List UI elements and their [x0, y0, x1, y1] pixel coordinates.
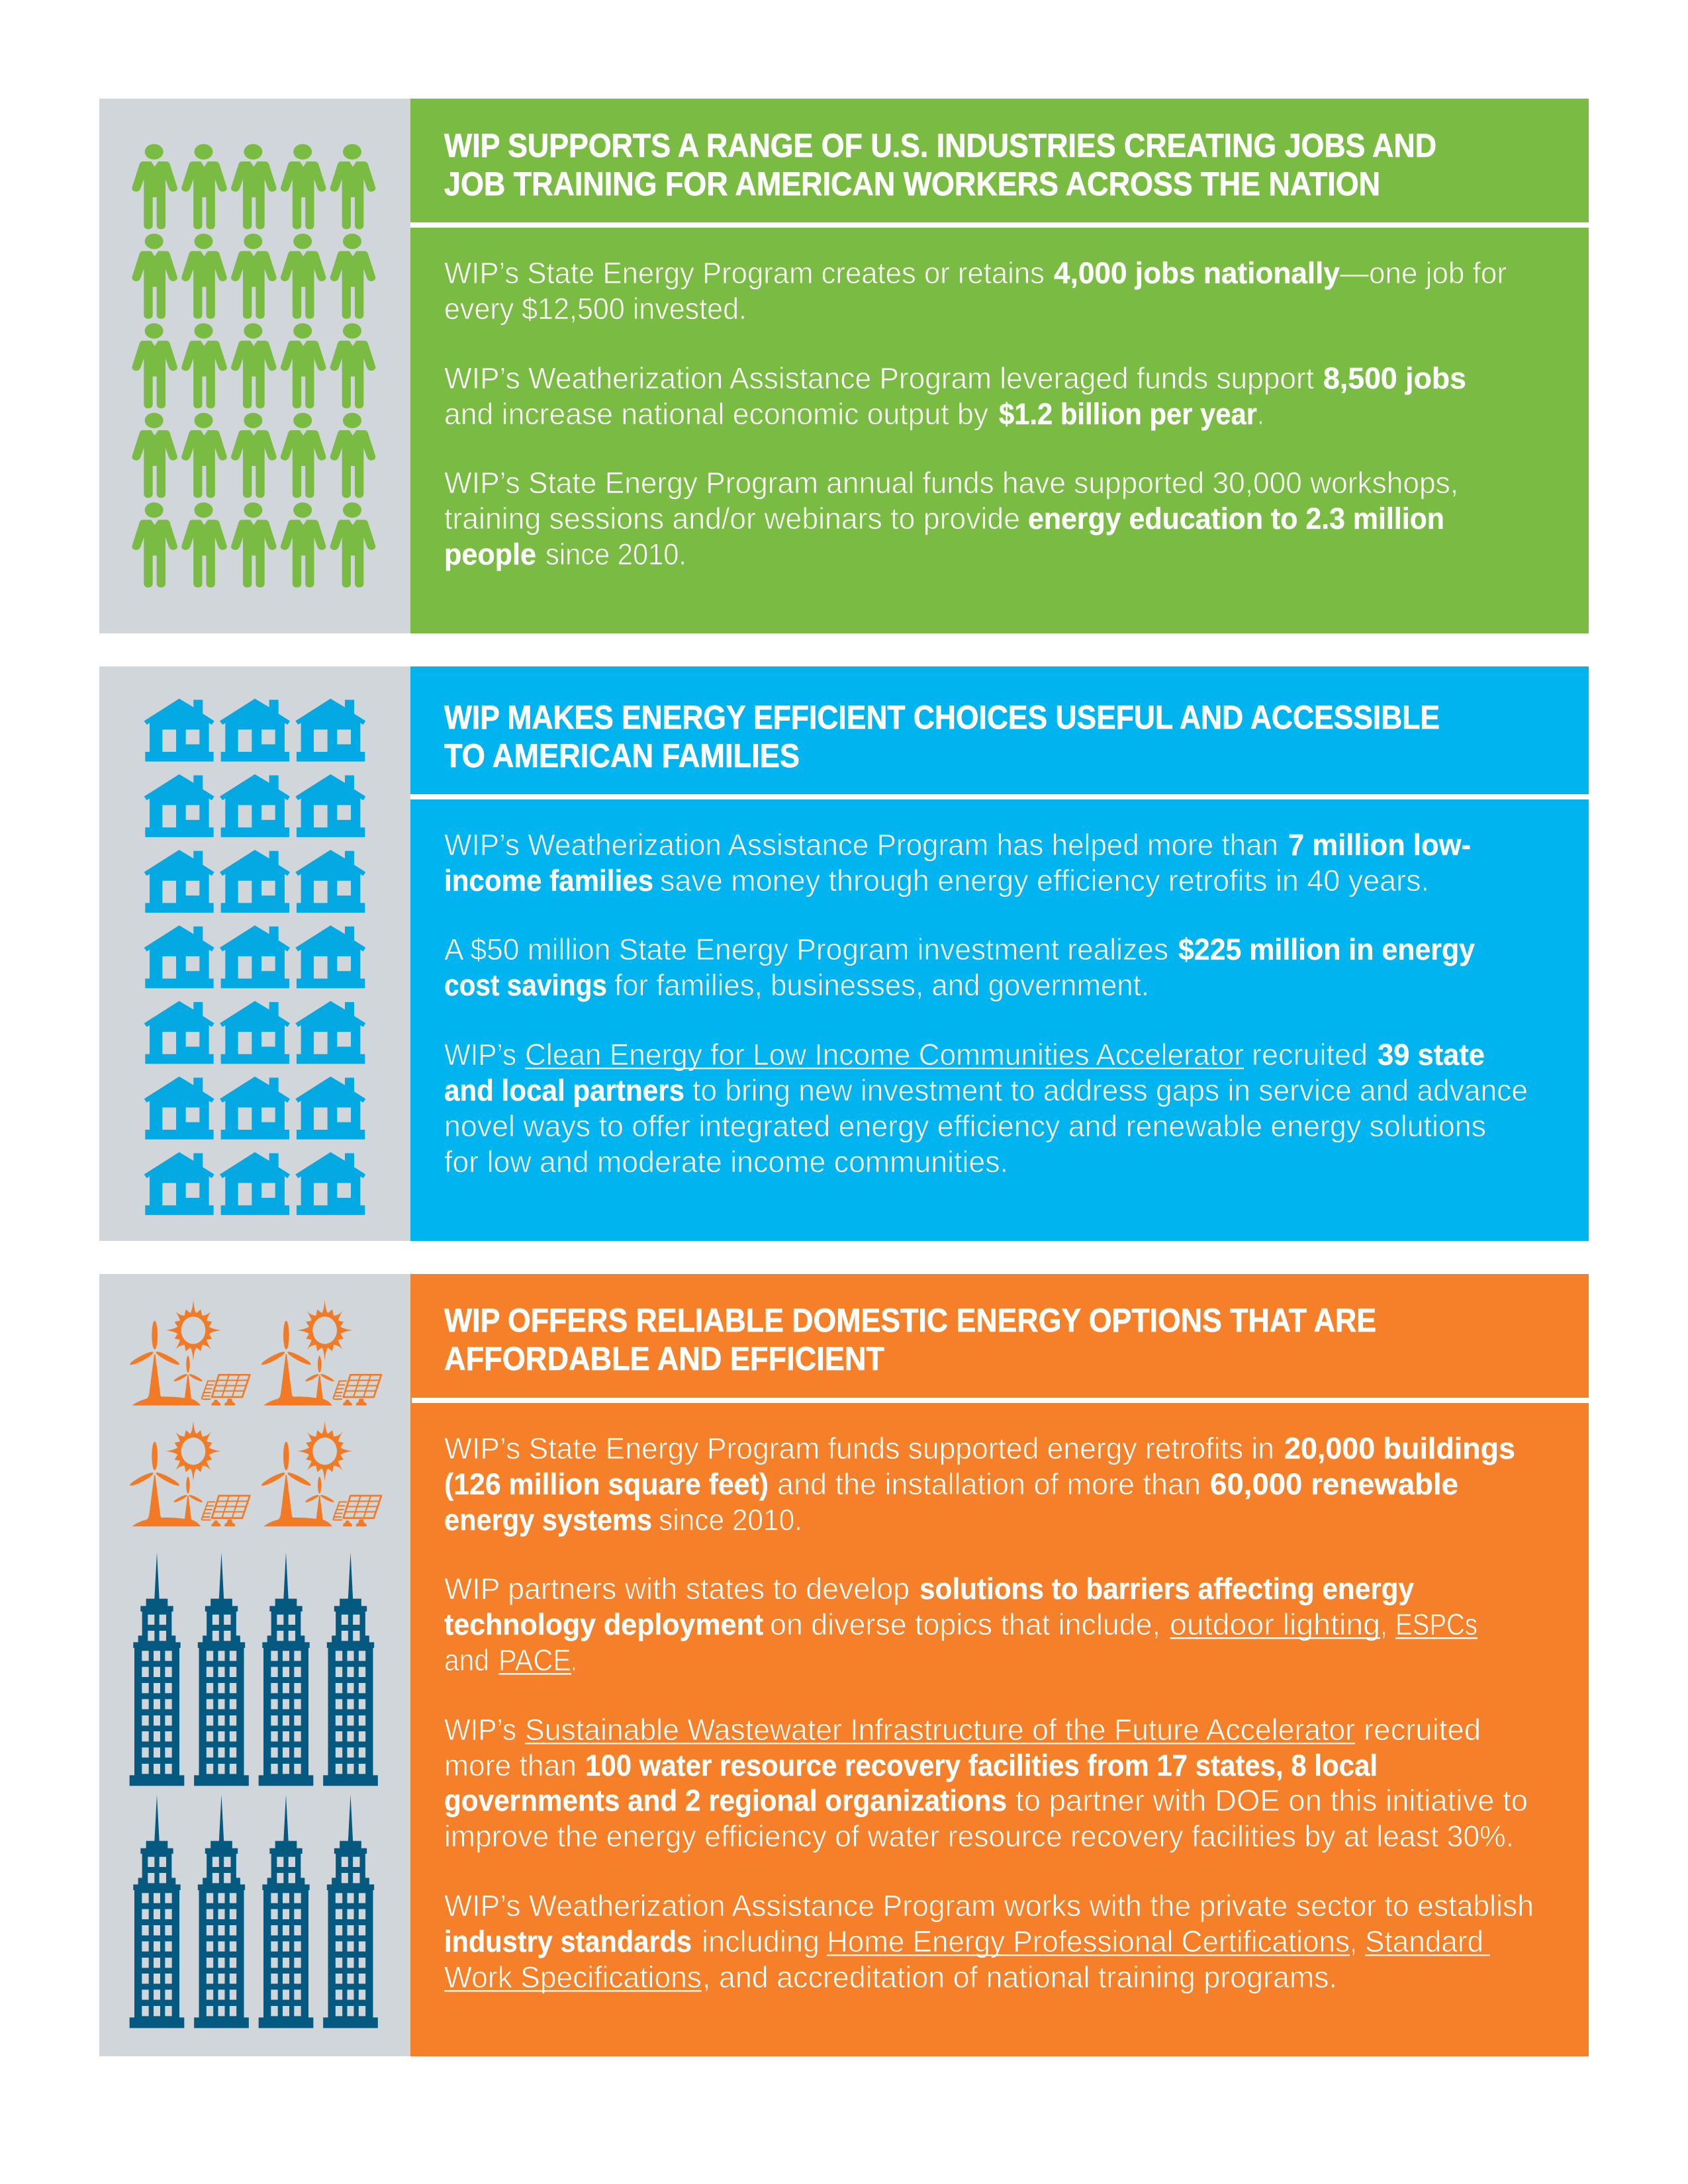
text block: cost savings: for families, businesses, and government. — [614, 968, 1149, 1002]
heading: families: TO AMERICAN FAMILIES — [444, 737, 800, 774]
text block: State Energy Program jobs: every $12,500 invested. — [444, 292, 747, 326]
heading: jobs: WIP SUPPORTS A RANGE OF U.S. INDUSTRIES CREATING JOBS AND — [444, 127, 1436, 164]
text block: retrofits: since 2010. — [659, 1503, 802, 1537]
heading: energy: AFFORDABLE AND EFFICIENT — [444, 1340, 884, 1377]
text block: barriers: outdoor lighting — [1170, 1608, 1380, 1641]
text block: accelerator — [444, 1038, 1528, 1179]
text block: barriers: on diverse topics that include, — [770, 1608, 1160, 1641]
text block: wastewater: 100 water resource recovery facilities from 17 states, 8 local — [585, 1749, 1378, 1782]
text block: workshops: since 2010. — [545, 537, 686, 571]
text block: industry standards: Work Specifications — [444, 1960, 702, 1994]
heading band: energy — [410, 1274, 1589, 1398]
text block: State Energy Program jobs: WIP’s State Energy Program creates or retains — [444, 256, 1045, 290]
text block: industry standards: , and accreditation of national training programs. — [702, 1960, 1337, 1994]
text block: retrofits: 60,000 renewable — [1210, 1467, 1458, 1501]
text block: retrofits — [444, 1432, 1515, 1537]
text block: wastewater — [444, 1713, 1528, 1853]
text block: workshops — [444, 466, 1458, 571]
text block: cost savings — [444, 933, 1475, 1002]
text block: industry standards — [444, 1889, 1534, 1994]
icon column background: energy — [99, 1274, 410, 2056]
text block: barriers: ESPCs — [1395, 1608, 1477, 1641]
text block: cost savings: A $50 million State Energy Program investment realizes — [444, 933, 1168, 966]
text block: State Energy Program jobs: —one job for — [1340, 256, 1507, 290]
text block: low-income families: 7 million low- — [1288, 828, 1471, 862]
text block: barriers: WIP partners with states to develop — [444, 1572, 910, 1606]
text block: wastewater: Sustainable Wastewater Infrastructure of the Future Accelerator — [525, 1713, 1355, 1747]
text block: barriers: and — [444, 1643, 489, 1677]
text block: cost savings: $225 million in energy — [1178, 933, 1475, 966]
text block: low-income families: WIP’s Weatherization Assistance Program has helped more than — [444, 828, 1278, 862]
text block: accelerator: to bring new investment to address gaps in service and advance — [692, 1073, 1528, 1107]
text block: retrofits: (126 million square feet) — [444, 1467, 769, 1501]
text block: State Energy Program jobs — [444, 256, 1507, 326]
text block: workshops: training sessions and/or webinars to provide — [444, 502, 1020, 535]
text block: workshops: people — [444, 537, 536, 571]
heading band: jobs — [410, 99, 1589, 222]
heading band: families — [410, 666, 1589, 794]
text block: wastewater: recruited — [1364, 1713, 1481, 1747]
text block: Weatherization jobs: $1.2 billion per year — [999, 397, 1257, 431]
text block: wastewater: governments and 2 regional organizations — [444, 1784, 1007, 1817]
heading: families — [444, 699, 1440, 774]
text block: industry standards: Home Energy Professional Certifications — [827, 1925, 1350, 1958]
heading: energy — [444, 1302, 1376, 1377]
text block: retrofits: and the installation of more than — [777, 1467, 1201, 1501]
text block: accelerator: 39 state — [1378, 1038, 1485, 1071]
text block: accelerator: Clean Energy for Low Income Communities Accelerator — [525, 1038, 1244, 1071]
text block: accelerator: and local partners — [444, 1073, 684, 1107]
text block: retrofits: WIP’s State Energy Program funds supported energy retrofits in — [444, 1432, 1274, 1465]
text block: low-income families: save money through energy efficiency retrofits in 40 years. — [660, 864, 1429, 897]
text block: workshops: energy education to 2.3 million — [1028, 502, 1444, 535]
text block: low-income families: income families — [444, 864, 653, 897]
text block: Weatherization jobs: WIP’s Weatherization Assistance Program leveraged funds support — [444, 361, 1314, 395]
text block: barriers: PACE — [498, 1643, 571, 1677]
icon grid: houses — [144, 699, 365, 1215]
text block: industry standards: WIP’s Weatherization Assistance Program works with the private sector to establish — [444, 1889, 1534, 1923]
heading: jobs — [444, 127, 1436, 203]
heading: families: WIP MAKES ENERGY EFFICIENT CHOICES USEFUL AND ACCESSIBLE — [444, 699, 1440, 736]
icon grid: wind and solar — [129, 1300, 381, 1526]
icon grid: skyscrapers — [130, 1553, 378, 2028]
text block: industry standards: including — [702, 1925, 820, 1958]
heading: jobs: JOB TRAINING FOR AMERICAN WORKERS ACROSS THE NATION — [444, 165, 1380, 203]
body band: families — [410, 799, 1589, 1241]
text block: accelerator: novel ways to offer integrated energy efficiency and renewable energy solutions — [444, 1109, 1486, 1143]
text block: retrofits: energy systems — [444, 1503, 652, 1537]
body band: energy — [410, 1403, 1589, 2056]
icon column background: jobs — [99, 99, 410, 633]
text block: cost savings: cost savings — [444, 968, 607, 1002]
text block: wastewater: to partner with DOE on this initiative to — [1015, 1784, 1528, 1817]
body band: jobs — [410, 228, 1589, 633]
text block: Weatherization jobs: . — [1258, 397, 1264, 431]
text block: accelerator: WIP’s — [444, 1038, 516, 1071]
panel: domestic energy — [99, 1274, 1589, 2056]
text block: industry standards: industry standards — [444, 1925, 692, 1958]
text block: workshops: WIP’s State Energy Program annual funds have supported 30,000 workshops, — [444, 466, 1458, 500]
text block: barriers: technology deployment — [444, 1608, 763, 1641]
text block: State Energy Program jobs: 4,000 jobs nationally — [1054, 256, 1340, 290]
text block: industry standards: , — [1350, 1925, 1356, 1958]
text block: Weatherization jobs: 8,500 jobs — [1323, 361, 1466, 395]
text block: barriers: solutions to barriers affecting energy — [919, 1572, 1414, 1606]
icon column background: families — [99, 666, 410, 1241]
text block: wastewater: more than — [444, 1749, 577, 1782]
text block: wastewater: WIP’s — [444, 1713, 516, 1747]
heading: energy: WIP OFFERS RELIABLE DOMESTIC ENERGY OPTIONS THAT ARE — [444, 1302, 1376, 1339]
panel: families — [99, 666, 1589, 1241]
text block: Weatherization jobs — [444, 361, 1466, 431]
text block: low-income families — [444, 828, 1471, 897]
text block: barriers: , — [1381, 1608, 1387, 1641]
text block: industry standards: Standard — [1365, 1925, 1483, 1958]
text block: accelerator: for low and moderate income communities. — [444, 1145, 1008, 1179]
text block: barriers — [444, 1572, 1477, 1677]
icon grid: people — [132, 144, 375, 588]
text block: wastewater: improve the energy efficiency of water resource recovery facilities by at least 30%. — [444, 1819, 1514, 1853]
text block: accelerator: recruited — [1252, 1038, 1368, 1071]
panel: jobs and job training — [99, 99, 1589, 633]
text block: Weatherization jobs: and increase national economic output by — [444, 397, 988, 431]
text block: barriers: . — [571, 1643, 577, 1677]
text block: retrofits: 20,000 buildings — [1284, 1432, 1515, 1465]
